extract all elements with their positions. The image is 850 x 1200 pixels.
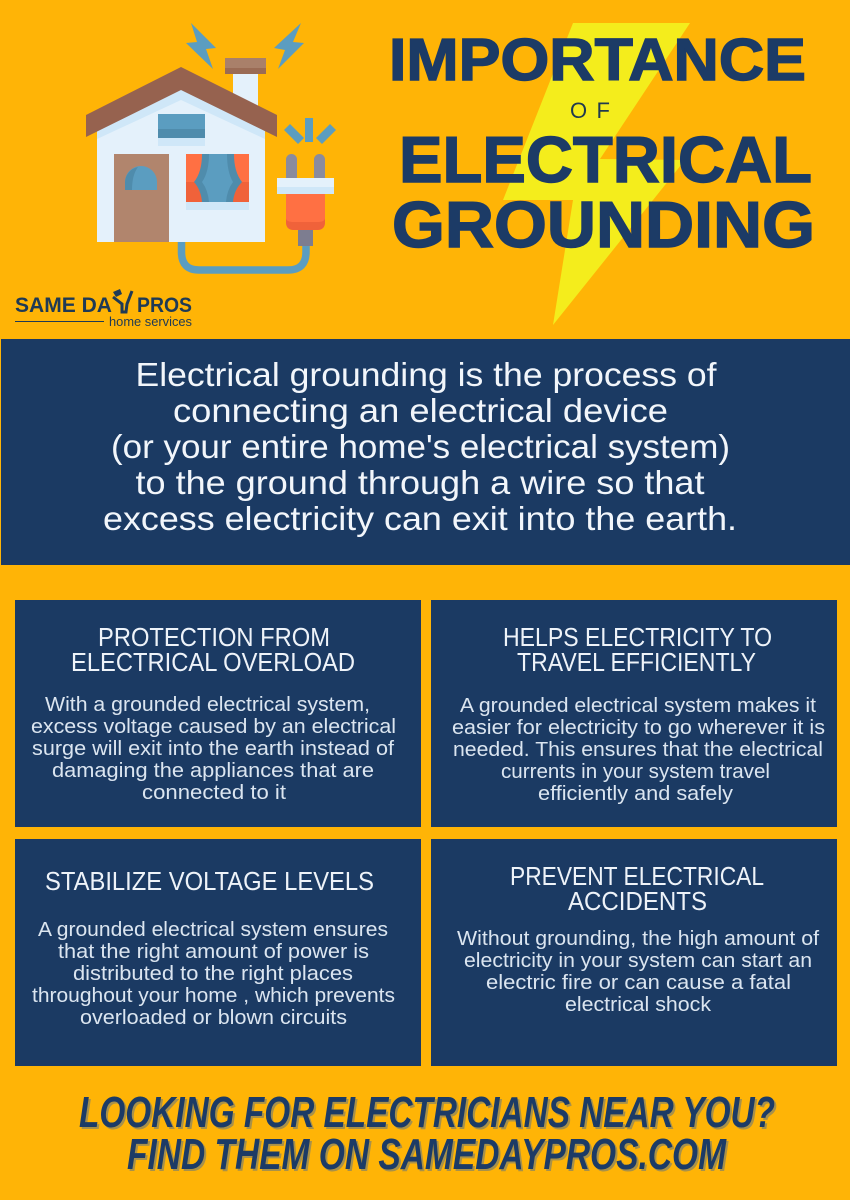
text: protection description: With a grounded electrical system, — [45, 693, 370, 716]
logo: Same Day Pros home services: PROS — [137, 294, 192, 317]
panel: stabilize voltage levels — [15, 839, 421, 1066]
text: protection description: surge will exit into the earth instead of — [32, 737, 394, 760]
text: efficiency description: currents in your system travel — [501, 760, 770, 783]
text: efficiency description — [452, 694, 825, 805]
call to action — [79, 1088, 775, 1179]
text: efficiency description: needed. This ensures that the electrical — [453, 738, 823, 761]
logo: Same Day Pros home services: home services — [109, 314, 192, 329]
heading: prevent electrical accidents: ACCIDENTS — [568, 886, 707, 916]
title: ELECTRICAL — [399, 123, 812, 196]
panel: prevent electrical accidents — [431, 839, 837, 1066]
heading: prevent electrical accidents: PREVENT ELECTRICAL — [510, 861, 764, 891]
icon: large yellow lightning bolt behind title — [503, 23, 690, 325]
panel: helps electricity to travel efficiently — [431, 600, 837, 827]
text: efficiency description: A grounded electrical system makes it — [460, 694, 816, 717]
heading: helps electricity to travel efficiently — [503, 622, 772, 677]
panel: definition banner — [1, 339, 850, 565]
heading: protection from electrical overload: ELECTRICAL OVERLOAD — [71, 647, 355, 677]
heading: protection from electrical overload — [71, 622, 355, 677]
text: protection description: damaging the appliances that are — [52, 759, 374, 782]
title: GROUNDING — [392, 188, 815, 261]
text: voltage description: throughout your home , which prevents — [32, 984, 395, 1007]
title: IMPORTANCE — [389, 27, 806, 93]
logo: Same Day Pros home services — [15, 289, 192, 329]
title: OF — [570, 98, 610, 123]
text: accidents description — [457, 927, 819, 1016]
text: protection description: connected to it — [142, 781, 286, 804]
text: voltage description — [32, 918, 395, 1029]
text: accidents description: electric fire or can cause a fatal — [486, 971, 791, 994]
text: voltage description: overloaded or blown circuits — [80, 1006, 347, 1029]
heading: protection from electrical overload: PROTECTION FROM — [98, 622, 330, 652]
text: accidents description: Without grounding, the high amount of — [457, 927, 819, 950]
logo: Same Day Pros home services: SAME DA — [15, 294, 112, 317]
panel: definition banner: (or your entire home's electrical system) — [111, 428, 730, 465]
text: accidents description: electricity in your system can start an — [464, 949, 812, 972]
panel: definition banner: connecting an electrical device — [173, 392, 668, 429]
heading: helps electricity to travel efficiently: HELPS ELECTRICITY TO — [503, 622, 772, 652]
text: accidents description: electrical shock — [565, 993, 712, 1016]
text: protection description: excess voltage caused by an electrical — [31, 715, 396, 738]
text: voltage description: distributed to the right places — [73, 962, 353, 985]
text: voltage description: A grounded electrical system ensures — [38, 918, 388, 941]
title — [389, 27, 815, 261]
heading: prevent electrical accidents — [510, 861, 764, 916]
text: efficiency description: efficiently and safely — [538, 782, 734, 805]
panel: definition banner: Electrical grounding is the process of — [136, 356, 717, 393]
text: efficiency description: easier for electricity to go wherever it is — [452, 716, 825, 739]
heading: helps electricity to travel efficiently: TRAVEL EFFICIENTLY — [517, 647, 756, 677]
panel: definition banner: excess electricity can exit into the earth. — [103, 500, 737, 537]
heading: stabilize voltage levels: STABILIZE VOLTAGE LEVELS — [45, 866, 374, 896]
text: protection description — [31, 693, 396, 804]
text: voltage description: that the right amount of power is — [58, 940, 369, 963]
panel: protection from electrical overload — [15, 600, 421, 827]
panel: definition banner: to the ground through a wire so that — [136, 464, 704, 501]
icon: house with electrical plug — [86, 23, 336, 270]
